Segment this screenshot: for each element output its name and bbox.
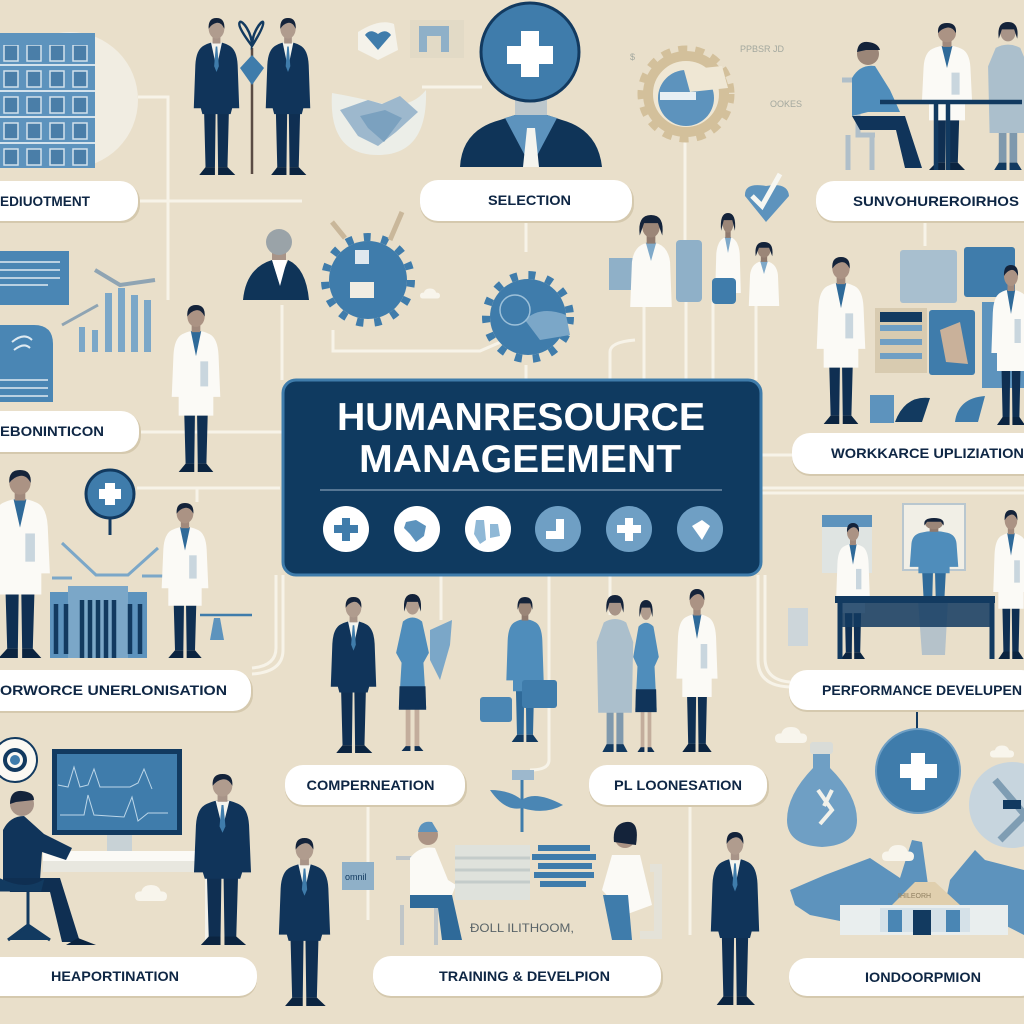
figure: seated man — [0, 791, 96, 945]
figure: manager right — [266, 18, 310, 175]
figure: staff right — [162, 503, 208, 658]
label: bottom right — [789, 958, 1024, 998]
label: performance — [789, 670, 1024, 712]
figure: suit man — [331, 597, 376, 753]
label: heaportination: HEAPORTINATION — [51, 968, 179, 984]
small sketch text: PPBSR JD — [740, 44, 785, 54]
label: selection: SELECTION — [488, 192, 571, 208]
icon: bouquet — [430, 620, 452, 680]
figure: woman — [836, 523, 870, 659]
label: top right — [816, 181, 1024, 223]
arrow small — [200, 615, 252, 640]
label: training: TRAINING & DEVELPION — [439, 968, 610, 984]
panel: recruitment — [0, 18, 310, 223]
bar chart — [62, 270, 155, 352]
icon: hands over hospital — [790, 840, 1024, 935]
panel: selection — [332, 3, 802, 223]
figure: doctor left — [0, 470, 50, 658]
chair — [842, 80, 875, 170]
icon: plus pin — [86, 470, 134, 535]
icon: hospital: IHILEORH — [898, 893, 931, 900]
label: top right: SUNVOHUREROIRHOS — [853, 193, 1019, 209]
figure: seated staff — [852, 42, 922, 168]
icon: heart card — [358, 22, 398, 60]
icon: eye — [0, 738, 37, 782]
sign: omnil — [345, 872, 367, 882]
figure: right staff — [991, 265, 1024, 425]
figure: seated nurse — [396, 822, 462, 945]
figures: healthcare group — [609, 213, 779, 307]
label: workforce unionisation — [0, 670, 253, 713]
monitor — [52, 749, 182, 851]
icon: virus gear right — [486, 275, 570, 359]
title: HUMANRESOURCE — [337, 396, 705, 439]
icon: handshake — [332, 90, 426, 155]
icon: flask — [787, 742, 857, 847]
figure: centre staff — [910, 518, 958, 655]
figure image circle — [969, 762, 1024, 848]
icon: suitcase left — [480, 697, 512, 722]
figure: doctor — [922, 23, 972, 170]
icon: plant — [239, 22, 264, 174]
icon: virus gear left — [325, 212, 411, 323]
title card — [283, 380, 761, 575]
grey cabinet — [788, 608, 808, 646]
label: communication — [0, 411, 141, 454]
panel: middle illustrations — [243, 212, 779, 359]
figure: woman in grey coat — [597, 595, 633, 752]
small sketch text — [630, 44, 802, 109]
speech bubble — [0, 325, 53, 402]
label: bottom right: IONDOORPMION — [865, 969, 981, 985]
icon: plus circle — [876, 729, 960, 813]
figure: standing man — [279, 838, 330, 1006]
icon: small frame — [410, 20, 464, 58]
label: recruitment — [0, 181, 140, 223]
label: workforce utilization: WORKKARCE UPLIZIATION — [831, 445, 1024, 461]
panel: bottom left — [0, 738, 257, 998]
panel: bottom right — [420, 288, 1024, 998]
table — [835, 596, 995, 659]
icon: caduceus — [490, 770, 563, 832]
equipment screens — [822, 504, 965, 573]
label: heaportination — [0, 957, 257, 998]
panel: training — [279, 770, 759, 1006]
icon: hospital building — [50, 586, 147, 658]
panel: workforce utilization — [792, 247, 1024, 476]
figure: doctor — [817, 257, 865, 424]
icon: hospital — [840, 882, 1008, 935]
label: compensation: COMPERNEATION — [306, 777, 434, 793]
figure: doctor — [172, 305, 220, 472]
stack of books — [532, 848, 596, 884]
panel: central title — [283, 380, 761, 575]
sign — [342, 862, 374, 890]
arrows — [52, 543, 164, 578]
icon: heart check — [745, 174, 789, 222]
panel: performance development — [788, 504, 1024, 712]
icon: medical head circle — [481, 3, 579, 101]
icon: gear — [641, 49, 731, 139]
label: training — [373, 956, 663, 998]
figure: nurse — [602, 822, 658, 940]
label: pl — [589, 765, 769, 807]
chart screens — [875, 247, 1024, 388]
label: selection — [420, 180, 634, 223]
connector lines — [137, 87, 1024, 935]
cloud — [135, 885, 167, 901]
medical equipment — [870, 395, 985, 423]
icon row — [323, 506, 723, 552]
label: recruitment: EDIUOTMENT — [0, 193, 90, 209]
panel: compensation group — [285, 589, 769, 807]
stack of pale papers — [455, 845, 530, 900]
label: compensation — [285, 765, 467, 807]
small sketch text: $ — [630, 52, 635, 62]
figure: woman in blue — [396, 594, 429, 751]
figure: right staff — [993, 510, 1024, 659]
panel: left communication — [0, 251, 220, 472]
figure: manager left — [194, 18, 239, 175]
figure: man in blue — [506, 597, 544, 742]
panel: top right team — [745, 22, 1024, 223]
panel: workforce unionisation — [0, 470, 253, 713]
label: pl: PL LOONESATION — [614, 777, 742, 793]
label: communication: EBONINTICON — [0, 423, 104, 439]
table — [880, 102, 1022, 170]
figure: bust left — [243, 229, 309, 300]
label: workforce utilization — [792, 433, 1024, 476]
callout card — [0, 251, 69, 305]
desk — [43, 851, 228, 944]
figure: executive bust — [460, 90, 602, 167]
title: MANAGEEMENT — [359, 438, 681, 481]
title — [337, 396, 705, 481]
figure: doctor — [676, 589, 718, 752]
small sketch text: OOKES — [770, 99, 802, 109]
label: performance: PERFORMANCE DEVELUPEN — [822, 682, 1022, 698]
label: workforce unionisation: ORWORCE UNERLONISATION — [0, 682, 227, 698]
caption: ĐOLL ILITHOOM, — [470, 921, 574, 935]
figure: man in dark suit — [711, 832, 759, 1005]
icon: suitcase right — [522, 680, 557, 708]
clouds — [420, 288, 1014, 861]
figure: doctor in grey coat — [988, 22, 1024, 170]
figure: standing man — [194, 774, 251, 945]
figure: woman in blue coat — [633, 600, 659, 752]
icon: building — [0, 32, 138, 168]
